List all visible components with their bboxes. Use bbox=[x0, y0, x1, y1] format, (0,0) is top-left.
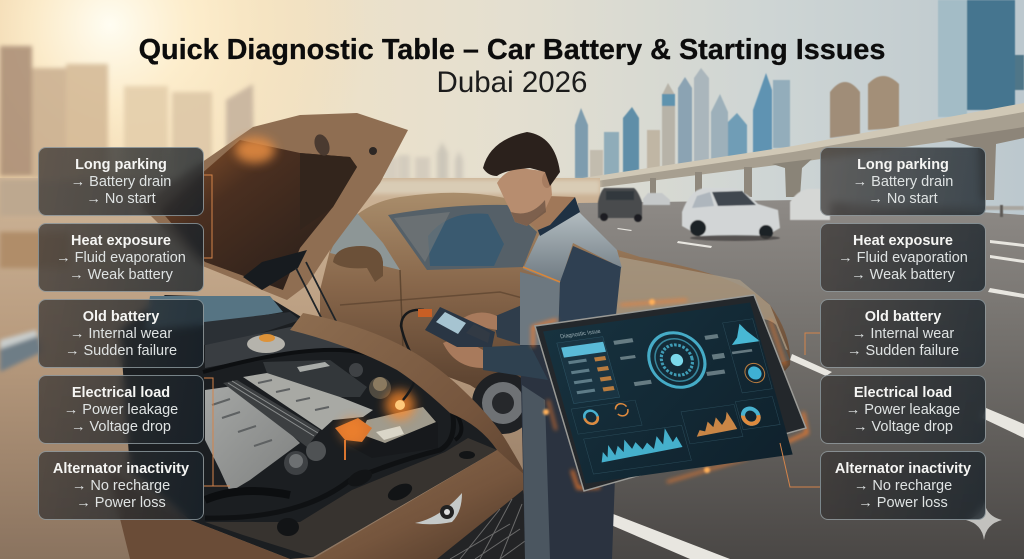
collar bbox=[537, 197, 580, 236]
left panel: old battery: → Sudden failure bbox=[65, 343, 177, 359]
engine parts bbox=[284, 451, 308, 475]
left hazy skyline bbox=[0, 46, 463, 183]
right panel: heat exposure bbox=[820, 223, 986, 292]
top bay rubber seal bbox=[203, 350, 461, 440]
Gemini sparkle mark bbox=[966, 501, 1002, 540]
right panel: old battery bbox=[820, 299, 986, 368]
lower left lip bbox=[108, 470, 290, 559]
right panel: long parking: → No start bbox=[868, 191, 938, 207]
right panel: electrical load: Electrical load bbox=[854, 385, 952, 401]
tablet mini charts bbox=[726, 322, 771, 385]
upper sleeve bbox=[493, 305, 522, 345]
right panel: old battery: Old battery bbox=[865, 309, 941, 325]
left panel: long parking: → No start bbox=[86, 191, 156, 207]
tablet orange area chart bbox=[691, 411, 738, 437]
left panel: old battery: Old battery bbox=[83, 309, 159, 325]
right panel: electrical load: → Voltage drop bbox=[853, 419, 953, 435]
roadside barrier bbox=[850, 205, 1024, 217]
road markings bbox=[604, 228, 1024, 559]
left panel: electrical load: → Power leakage bbox=[64, 402, 178, 418]
jacket chest bbox=[520, 272, 560, 345]
tablet glow bbox=[533, 300, 807, 488]
tablet radial gauge bbox=[642, 329, 711, 391]
jacket shoulders bbox=[523, 210, 622, 284]
front grille of gold car bbox=[736, 318, 790, 368]
trousers and lower body bbox=[520, 340, 620, 559]
hair bbox=[483, 132, 560, 186]
open hood bbox=[140, 113, 408, 335]
diagnostic cable bbox=[401, 310, 424, 400]
left panel: alternator inactivity: → Power loss bbox=[76, 495, 166, 511]
background traffic cars bbox=[598, 188, 830, 241]
car front fender and grille bbox=[108, 313, 547, 559]
lower sleeve bbox=[483, 345, 548, 380]
road bbox=[578, 200, 1024, 559]
left panel: electrical load: → Voltage drop bbox=[71, 419, 171, 435]
engine bay bbox=[120, 295, 505, 559]
car battery with glowing terminals bbox=[335, 309, 438, 460]
right panel: electrical load: → Power leakage bbox=[846, 402, 960, 418]
right panel: electrical load bbox=[820, 375, 986, 444]
tablet donut gauges bbox=[582, 386, 760, 446]
left panel: electrical load bbox=[38, 375, 204, 444]
hands bbox=[443, 340, 483, 368]
right panel: alternator inactivity: → Power loss bbox=[858, 495, 948, 511]
left panel: long parking: → Battery drain bbox=[71, 174, 171, 190]
left panel: old battery: → Internal wear bbox=[70, 326, 172, 342]
dark arm bbox=[558, 246, 621, 340]
coolant reservoir bbox=[247, 334, 285, 353]
right panel: heat exposure: → Fluid evaporation bbox=[838, 250, 968, 266]
top engine cover bbox=[263, 360, 367, 397]
right panel: alternator inactivity: → No recharge bbox=[854, 478, 952, 494]
tablet status list bbox=[557, 337, 620, 404]
neck bbox=[528, 196, 575, 230]
right panel: heat exposure: → Weak battery bbox=[851, 267, 955, 283]
left engine cover bbox=[205, 385, 300, 492]
left panel: heat exposure: → Fluid evaporation bbox=[56, 250, 186, 266]
right panel: long parking: → Battery drain bbox=[853, 174, 953, 190]
grille bbox=[437, 490, 530, 559]
right engine cover bbox=[243, 373, 373, 430]
tablet sparks bbox=[543, 299, 710, 473]
gold car body bbox=[320, 193, 790, 434]
side mirror bbox=[333, 246, 383, 282]
tablet heading: Diagnostic Issue bbox=[560, 329, 601, 340]
right panel: heat exposure: Heat exposure bbox=[853, 233, 953, 249]
left panel: heat exposure: → Weak battery bbox=[69, 267, 173, 283]
ribbed centre rail bbox=[223, 380, 320, 447]
left panel: heat exposure: Heat exposure bbox=[71, 233, 171, 249]
sky background bbox=[0, 0, 1024, 300]
fender rim bbox=[290, 313, 547, 559]
right panel: old battery: → Sudden failure bbox=[847, 343, 959, 359]
ground left bbox=[0, 178, 600, 559]
horizon haze and roadside bbox=[0, 180, 600, 372]
orange connector lines bbox=[204, 175, 820, 487]
side window bbox=[330, 213, 400, 270]
title: Quick Diagnostic Table – Car Battery & Starting Issues bbox=[139, 34, 885, 66]
left panel: alternator inactivity: → No recharge bbox=[72, 478, 170, 494]
right panel: alternator inactivity: Alternator inactivity bbox=[835, 461, 971, 477]
right panel: long parking: Long parking bbox=[857, 157, 949, 173]
left panel: heat exposure bbox=[38, 223, 204, 292]
left panel: long parking bbox=[38, 147, 204, 216]
hoses bbox=[205, 410, 454, 518]
left panel: alternator inactivity: Alternator inactivity bbox=[53, 461, 189, 477]
OBD handheld scanner bbox=[425, 307, 495, 347]
left panel: long parking: Long parking bbox=[75, 157, 167, 173]
windscreen base bbox=[145, 296, 283, 330]
left panel: electrical load: Electrical load bbox=[72, 385, 170, 401]
face bbox=[497, 168, 552, 226]
dark slam panel bbox=[205, 438, 497, 557]
left panel: alternator inactivity bbox=[38, 451, 204, 520]
bronze nose bbox=[313, 450, 540, 559]
diagnostic tablet bbox=[535, 295, 806, 491]
right panel: long parking bbox=[820, 147, 986, 216]
right panel: alternator inactivity bbox=[820, 451, 986, 520]
left panel: old battery bbox=[38, 299, 204, 368]
subtitle: Dubai 2026 bbox=[437, 66, 587, 99]
mechanic bbox=[443, 132, 622, 559]
windshield bbox=[388, 205, 537, 270]
emblem bbox=[415, 493, 462, 524]
tablet blue area chart bbox=[595, 427, 684, 462]
elevated highway bbox=[563, 103, 1024, 200]
right panel: old battery: → Internal wear bbox=[852, 326, 954, 342]
right city skyline bbox=[575, 0, 1024, 180]
